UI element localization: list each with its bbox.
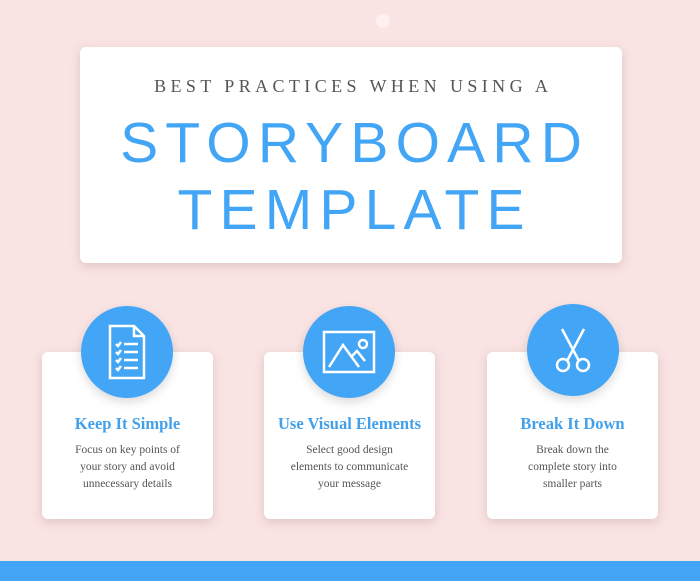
text: elements to communicate [291,461,408,473]
heading: Keep It Simple [75,414,180,433]
main title: STORYBOARD [120,111,589,175]
text [75,444,180,490]
icon: scissors [527,304,619,396]
heading: Use Visual Elements [278,414,421,433]
text: your story and avoid [80,461,175,473]
card: keep it simple [42,352,213,519]
decorative dots [376,14,390,28]
main title: TEMPLATE [177,178,532,242]
text [291,444,408,490]
text: your message [318,478,381,490]
heading: Break It Down [520,414,625,433]
card: break it down [487,352,658,519]
text [528,444,617,490]
icon: image [303,306,395,398]
text: smaller parts [543,478,602,490]
text: Focus on key points of [75,444,180,456]
subtitle: BEST PRACTICES WHEN USING A [154,76,552,96]
title panel [80,47,622,263]
text: Break down the [536,444,609,456]
text: complete story into [528,461,617,473]
card: visual elements [264,352,435,519]
main title [120,111,589,242]
icon: document checklist [81,306,173,398]
text: unnecessary details [83,478,172,490]
bottom bar [0,561,700,581]
text: Select good design [306,444,393,456]
